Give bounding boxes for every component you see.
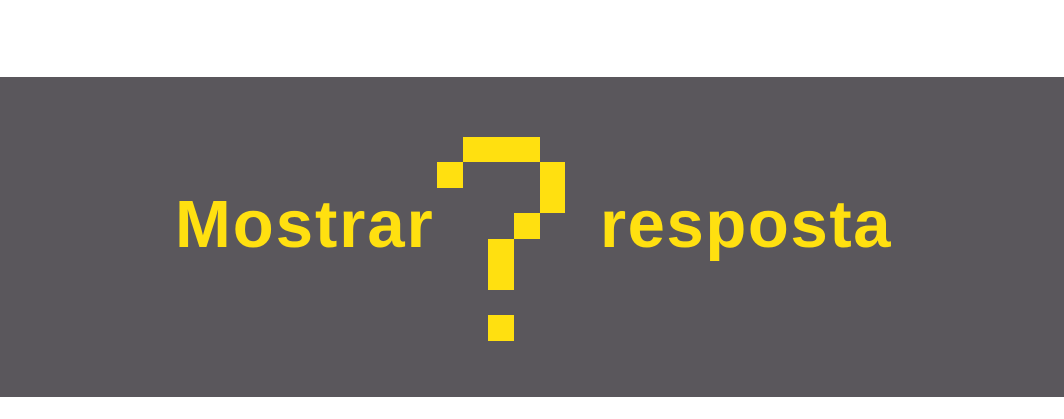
- panel: dark band: [0, 77, 1064, 397]
- text: Mostrar: Mostrar: [175, 187, 435, 262]
- text: resposta: resposta: [600, 187, 892, 262]
- icon: pixel question mark: [437, 137, 565, 341]
